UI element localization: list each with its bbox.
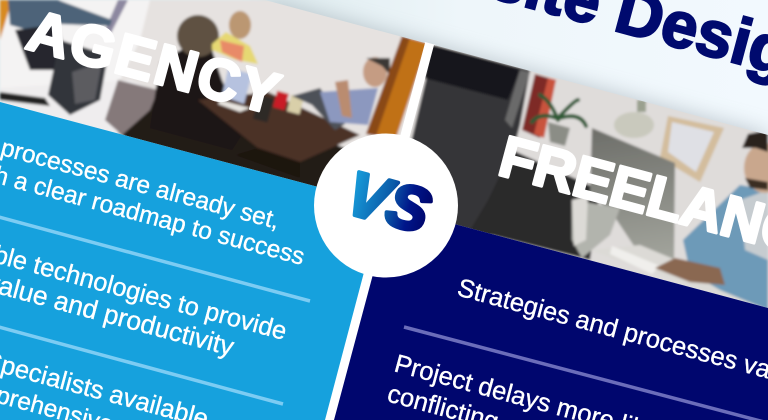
freelancer list text [384,274,768,420]
grey chair [105,80,158,135]
man with glasses [292,88,345,130]
panel: agency list [0,102,382,420]
lamp [614,112,654,138]
woman [212,32,258,64]
table [198,92,360,162]
photo drop shadow [265,0,768,175]
floor [0,80,138,134]
panel: freelancer list [334,207,768,420]
panel: agency photo [0,0,425,186]
monitor [590,128,675,265]
vs badge [314,134,458,278]
freelancer divider [404,327,768,420]
office chair [15,24,70,70]
curtain [522,74,556,138]
laptop [222,68,252,104]
heading: agency: AGENCY [21,0,287,127]
dark wall [410,46,531,234]
plant [532,95,586,126]
desk and keyboard [634,244,674,264]
cups [253,95,274,123]
wood column [374,38,425,134]
panel: freelancer photo [380,40,768,310]
agency divider 1 [0,216,310,301]
seated man dark [154,48,226,104]
vs badge: VS [339,159,437,247]
person in blue shirt [8,0,112,32]
agency list text [0,92,310,420]
agency divider 2 [0,326,283,404]
picture frame [660,116,724,182]
white gap between panels [324,42,436,420]
man [683,185,768,310]
